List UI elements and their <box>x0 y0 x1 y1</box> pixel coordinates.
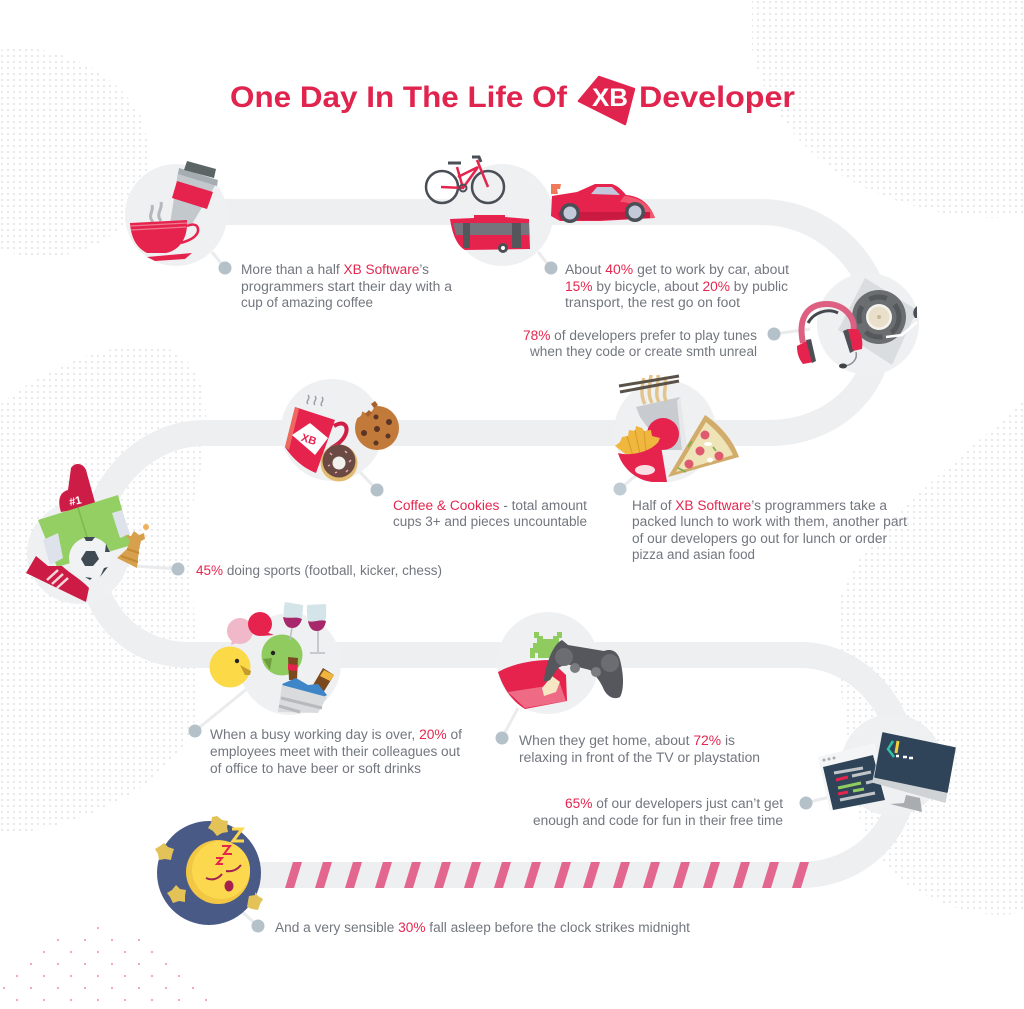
icon: bicycle <box>426 157 504 203</box>
title <box>230 77 795 124</box>
icon: bus <box>450 215 530 253</box>
title: One Day In The Life Of <box>230 81 568 114</box>
text: lunch <box>614 482 907 562</box>
background dot pattern: top right <box>752 0 1024 218</box>
icon: foam finger: #1 <box>68 494 83 509</box>
icon: donut <box>320 444 358 482</box>
icon: game controller <box>544 640 623 698</box>
text: lunch: of our developers go out for lunch or order <box>632 531 888 546</box>
background dot pattern: right <box>837 400 1024 915</box>
text: coffee: cup of amazing coffee <box>241 295 373 310</box>
icon: sleeping face <box>206 829 244 892</box>
text: coffee <box>218 262 452 310</box>
text: gaming <box>496 732 760 765</box>
icon: cookie <box>350 399 399 450</box>
text: transport <box>544 262 789 310</box>
icon: green bird <box>262 634 302 676</box>
panel: coffee <box>125 161 227 268</box>
panel: sports <box>26 464 178 604</box>
text: transport: About 40% get to work by car, about <box>565 262 789 277</box>
panel: sleep <box>155 816 263 926</box>
panel: gaming <box>497 612 623 738</box>
icon: chess king <box>117 524 149 568</box>
icon: pizza <box>668 415 739 477</box>
text: cookies <box>370 484 587 529</box>
text: sports: 45% doing sports (football, kicker, chess) <box>196 563 442 578</box>
panel: cookies <box>281 379 399 490</box>
icon: car <box>551 184 655 223</box>
background dot pattern: left <box>0 345 206 835</box>
text: drinks <box>188 724 462 776</box>
text: music: 78% of developers prefer to play tunes <box>523 328 757 343</box>
icon: headphones <box>797 304 862 368</box>
icon: moon night <box>155 816 263 925</box>
text: coffee: programmers start their day with a <box>241 279 452 294</box>
icon: yellow bird <box>210 646 251 688</box>
icon: field <box>38 495 132 567</box>
background dot pattern: top left <box>0 48 149 257</box>
icon: paper cup <box>170 161 218 224</box>
text: coding <box>533 796 812 828</box>
icon: foam finger <box>59 464 96 512</box>
icon: monitor <box>873 733 955 812</box>
icon: sneaker <box>26 556 89 602</box>
text: cookies: cups 3+ and pieces uncountable <box>393 514 587 529</box>
icon: XB mug: XB <box>300 432 318 448</box>
icon: coffee cup <box>130 202 198 261</box>
panel: transport <box>426 157 655 268</box>
panel: coding <box>805 714 955 816</box>
icon: space invader <box>530 632 566 658</box>
text: lunch: packed lunch to work with them, another part <box>632 514 907 529</box>
panel: music <box>774 273 919 375</box>
background dot pattern: bottom left red <box>0 927 222 1009</box>
text: drinks: When a busy working day is over, 20% of <box>210 727 462 742</box>
text: music: when they code or create smth unreal <box>529 344 757 359</box>
text: lunch: Half of XB Software’s programmers take a <box>632 498 887 513</box>
icon: speech bubbles <box>227 612 274 645</box>
text: drinks: employees meet with their colleagues out <box>210 744 460 759</box>
text: gaming: When they get home, about 72% is <box>519 733 735 748</box>
icon: football <box>69 537 111 580</box>
logo: XB: XB <box>592 84 628 112</box>
icon: sofa <box>498 660 567 709</box>
logo: XB <box>579 77 634 124</box>
text: coding: 65% of our developers just can’t get <box>565 796 783 811</box>
text: lunch: pizza and asian food <box>632 547 755 562</box>
text: transport: transport, the rest go on foot <box>565 295 740 310</box>
text: coffee: More than a half XB Software’s <box>241 262 429 277</box>
icon: wine glasses <box>283 602 326 653</box>
text: sleep: And a very sensible 30% fall asleep before the clock strikes midnight <box>275 920 690 935</box>
text: music <box>523 328 780 359</box>
title: Developer <box>639 81 795 114</box>
text: coding: enough and code for fun in their free time <box>533 813 783 828</box>
road path <box>90 212 905 875</box>
panel: drinks <box>195 602 341 731</box>
text: transport: 15% by bicycle, about 20% by public <box>565 279 788 294</box>
icon: turntable <box>838 278 917 365</box>
text: drinks: of office to have beer or soft drinks <box>210 761 421 776</box>
road dashed stripes <box>285 862 809 888</box>
text: cookies: Coffee & Cookies - total amount <box>393 498 587 513</box>
icon: fries <box>615 418 679 482</box>
panel: lunch <box>614 375 739 489</box>
icon: code window <box>818 743 885 811</box>
icon: ice bucket <box>278 657 334 713</box>
text: gaming: relaxing in front of the TV or playstation <box>519 750 760 765</box>
icon: noodles box <box>619 375 687 452</box>
